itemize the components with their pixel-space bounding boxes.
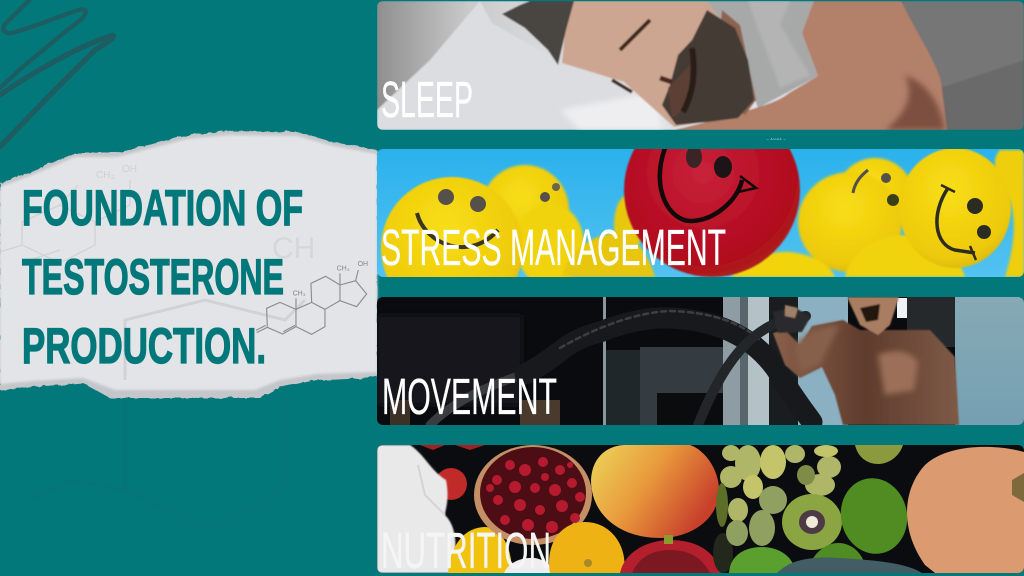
dark aubergine <box>713 533 733 573</box>
yellow citrus left <box>448 527 512 573</box>
pomegranate <box>620 535 721 573</box>
kiwi <box>782 445 903 550</box>
panel: stress management <box>377 149 1024 277</box>
athlete <box>773 297 959 425</box>
panel: sleep <box>377 1 1024 130</box>
grapes <box>716 445 841 546</box>
man: face <box>562 1 720 128</box>
lime <box>840 478 908 554</box>
white onion <box>504 558 554 573</box>
lemon <box>549 522 625 573</box>
pillow <box>377 2 526 130</box>
hair <box>502 1 574 65</box>
molecule diagram: testosterone: OH <box>358 261 368 268</box>
left smiley ball <box>380 176 560 277</box>
red smiley ball <box>623 149 801 277</box>
label: sleep: SLEEP <box>381 71 473 128</box>
broccoli <box>777 558 922 573</box>
gym background <box>640 347 723 425</box>
faint molecule watermark on paper: CH <box>272 232 315 265</box>
right smiley ball <box>853 148 1011 268</box>
eyes, nose and smile <box>620 20 650 50</box>
molecule diagram: testosterone <box>256 261 368 334</box>
panel: nutrition <box>377 445 1024 576</box>
shirt <box>700 1 818 108</box>
white vegetable <box>377 445 455 573</box>
man: arm <box>674 1 947 130</box>
heading: TESTOSTERONE <box>22 249 284 305</box>
beard <box>662 10 754 125</box>
faint molecule watermark on paper: CH₃ <box>96 170 115 181</box>
battle ropes <box>430 311 812 425</box>
torn paper panel <box>0 131 377 398</box>
tomato <box>435 468 467 500</box>
background balls <box>481 150 1024 287</box>
mango <box>591 445 719 538</box>
red fruit top <box>420 445 485 450</box>
tiny caption smudge: — Arnold — <box>766 137 786 141</box>
pumpkin <box>907 447 1024 573</box>
decorative scribble <box>0 0 113 147</box>
panel: movement <box>377 297 1024 425</box>
molecule diagram: testosterone: CH₃ <box>293 291 306 298</box>
faint molecule watermark on paper <box>0 164 315 380</box>
heading <box>22 180 303 374</box>
label: stress management: STRESS MANAGEMENT <box>381 219 726 276</box>
grey background right <box>900 1 1024 88</box>
bowl of cranberries <box>474 445 592 545</box>
heading: FOUNDATION OF <box>22 180 303 236</box>
faint hexagon watermark on teal <box>30 400 285 530</box>
man: neck <box>720 10 756 115</box>
molecule diagram: testosterone: CH₃ <box>337 265 350 272</box>
label: movement: MOVEMENT <box>382 368 557 425</box>
heading: PRODUCTION. <box>22 318 266 374</box>
faint molecule watermark on paper: OH <box>122 164 137 175</box>
